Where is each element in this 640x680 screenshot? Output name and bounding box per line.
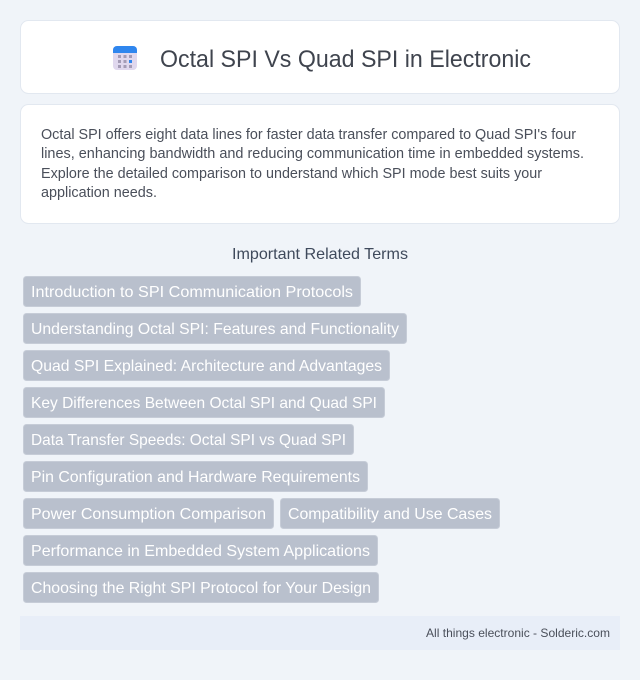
tag: pin configuration: Pin Configuration and Hardware Requirements <box>31 469 360 486</box>
tag: introduction <box>24 276 360 306</box>
icon: calendar <box>113 46 137 70</box>
title panel <box>20 20 620 94</box>
description text: lines, enhancing bandwidth and reducing communication time in embedded systems. <box>41 146 584 162</box>
heading: important related terms: Important Related Terms <box>232 246 408 263</box>
tag: introduction: Introduction to SPI Communication Protocols <box>31 284 353 301</box>
tag list <box>24 276 500 602</box>
tag: key differences: Key Differences Between Octal SPI and Quad SPI <box>31 395 377 412</box>
tag: compatibility: Compatibility and Use Cases <box>288 506 492 523</box>
tag: choosing: Choosing the Right SPI Protocol for Your Design <box>31 580 371 597</box>
tag: compatibility <box>280 498 500 528</box>
description text: Explore the detailed comparison to understand which SPI mode best suits your <box>41 166 542 182</box>
footer: All things electronic - Solderic.com <box>426 626 610 640</box>
tag: quad explained <box>24 350 390 380</box>
footer <box>20 616 620 650</box>
description text: application needs. <box>41 185 157 201</box>
tag: data transfer speeds <box>24 424 354 454</box>
tag: performance: Performance in Embedded System Applications <box>31 543 370 560</box>
tag: power consumption <box>24 498 274 528</box>
tag: key differences <box>24 388 384 418</box>
title: Octal SPI Vs Quad SPI in Electronic <box>160 46 531 73</box>
tag: understanding octal: Understanding Octal SPI: Features and Functionality <box>31 321 399 338</box>
description text: Octal SPI offers eight data lines for faster data transfer compared to Quad SPI's four <box>41 127 576 143</box>
panel: description <box>20 104 620 224</box>
tag: pin configuration <box>24 462 368 492</box>
tag: power consumption: Power Consumption Comparison <box>31 506 266 523</box>
tag: understanding octal <box>24 314 406 344</box>
tag: data transfer speeds: Data Transfer Speeds: Octal SPI vs Quad SPI <box>31 432 346 449</box>
tag: choosing <box>24 572 378 602</box>
description text <box>41 127 584 201</box>
tag: performance <box>24 536 378 566</box>
tag: quad explained: Quad SPI Explained: Architecture and Advantages <box>31 358 382 375</box>
